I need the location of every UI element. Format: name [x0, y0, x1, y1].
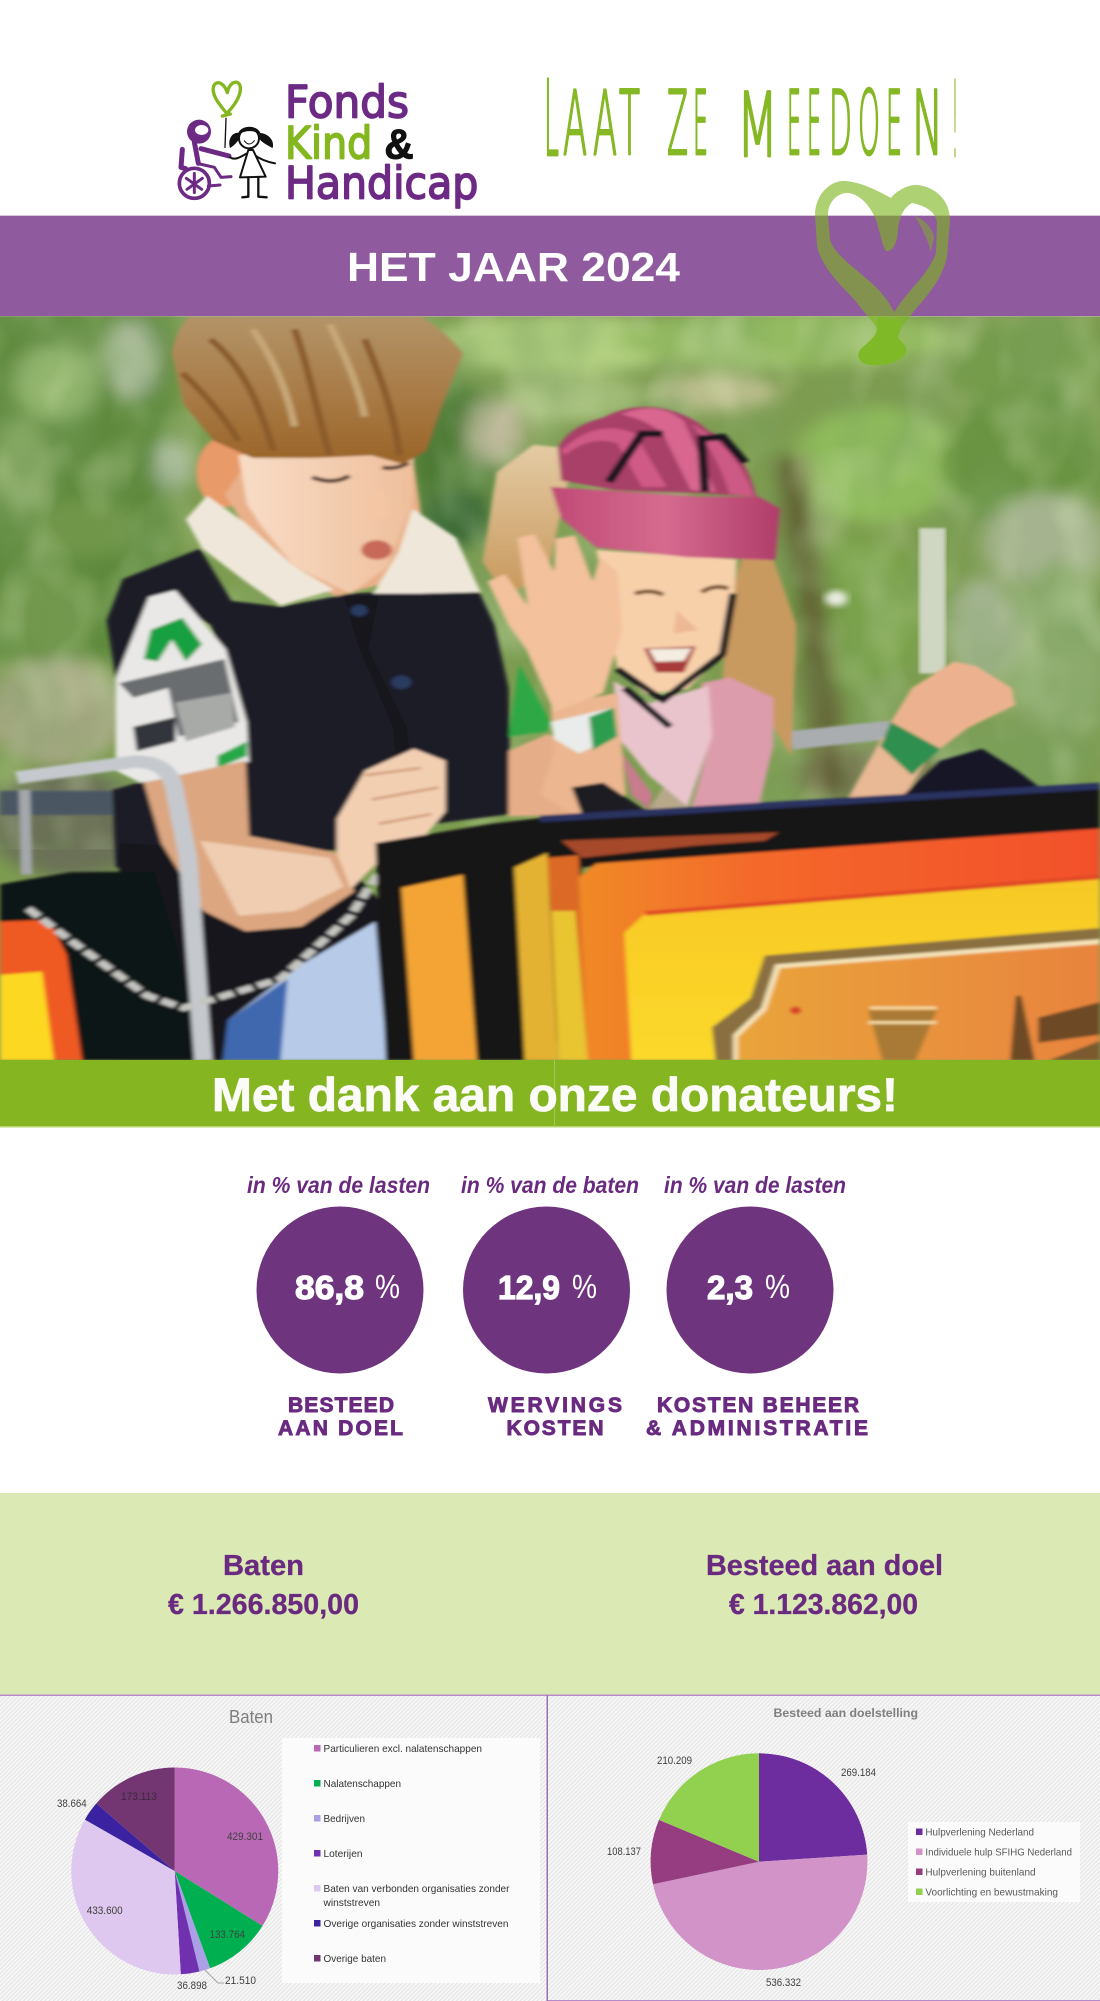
banner: met dank aan onze donateurs	[0, 1060, 1100, 1128]
stat: besteed aan doel: 86,8	[295, 1269, 364, 1306]
chart legend: baten: Overige organisaties zonder winststreven	[324, 1918, 509, 1930]
stat: besteed aan doel: %	[375, 1268, 400, 1305]
slogan: Laat ze meedoen!: A	[563, 72, 587, 175]
left seat	[0, 871, 203, 1060]
total: baten	[168, 1550, 359, 1621]
slogan: Laat ze meedoen!: L	[544, 58, 559, 180]
boy: fleece collar	[186, 496, 334, 606]
stat: besteed aan doel: in % van de lasten	[247, 1172, 430, 1198]
infographic page: !	[952, 59, 958, 181]
pie chart: baten: 38.664	[57, 1798, 87, 1810]
photo background foliage	[0, 310, 1100, 1060]
stat: besteed aan doel: AAN DOEL	[278, 1417, 403, 1440]
slogan: Laat ze meedoen!: E	[787, 72, 801, 175]
chart legend: baten: Loterijen	[324, 1848, 363, 1860]
stat: wervingskosten: KOSTEN	[506, 1417, 604, 1440]
red and yellow left panel	[0, 920, 82, 1060]
pie chart: besteed aan doelstelling: 108.137	[607, 1846, 641, 1858]
boy: ear, neck and face	[196, 437, 250, 507]
chart legend: baten: Overige baten	[324, 1953, 386, 1965]
logo text	[285, 77, 478, 209]
stat: kosten beheer en administratie: in % van de lasten	[664, 1172, 846, 1198]
total: besteed aan doel	[706, 1550, 943, 1621]
girl: face	[596, 550, 737, 694]
chart legend: besteed aan doelstelling: Individuele hulp SFIHG Nederland	[925, 1846, 1072, 1858]
logo text: Fonds	[285, 77, 409, 129]
cup and building icons	[868, 1010, 937, 1060]
photo: two children on a fairground ride	[0, 310, 1100, 1060]
chart legend: besteed aan doelstelling: Voorlichting en bewustmaking	[925, 1886, 1058, 1898]
chart title: besteed aan doelstelling: Besteed aan doelstelling	[774, 1706, 918, 1720]
chart legend: besteed aan doelstelling: Hulpverlening Nederland	[925, 1826, 1034, 1838]
pie chart: baten: 173.113	[121, 1791, 157, 1803]
stat: kosten beheer en administratie: & ADMINISTRATIE	[646, 1417, 868, 1440]
chart legend: baten: Nalatenschappen	[324, 1778, 401, 1790]
slogan: Laat ze meedoen!: D	[829, 72, 852, 175]
pie chart: baten: 133.764	[210, 1929, 245, 1941]
logo text: Kind	[285, 117, 372, 169]
stat: besteed aan doel	[247, 1172, 430, 1440]
logo text: &	[384, 120, 414, 167]
boy: vest	[107, 548, 511, 855]
girl: chin strap	[617, 594, 733, 727]
girl: hair back	[483, 445, 570, 596]
chart legend: baten	[282, 1738, 540, 1983]
boy: arm	[144, 761, 354, 931]
boy: hair	[172, 316, 463, 464]
girl: left arm and sleeve	[509, 664, 551, 737]
logo text: Handicap	[285, 157, 478, 209]
stat: besteed aan doel: BESTEED	[288, 1394, 394, 1417]
seat handles	[904, 749, 1040, 795]
chart legend: baten: Baten van verbonden organisaties zonder	[324, 1883, 510, 1895]
stat: kosten beheer en administratie: %	[765, 1268, 790, 1305]
chart legend: baten: winststreven	[323, 1897, 380, 1909]
stat: wervingskosten: 12,9	[498, 1269, 560, 1306]
chart legend: baten: Bedrijven	[324, 1813, 365, 1825]
boy: jeans	[223, 922, 387, 1060]
stat: wervingskosten: in % van de baten	[461, 1172, 639, 1198]
slogan: Laat ze meedoen!: E	[807, 72, 821, 175]
panel: besteed aan doelstelling chart	[548, 1695, 1100, 2001]
stat: wervingskosten: WERVINGS	[488, 1394, 622, 1417]
total: besteed aan doel: Besteed aan doel	[706, 1550, 943, 1582]
silver rail behind girl	[791, 730, 891, 740]
icon: heart balloon	[213, 82, 240, 116]
stat: kosten beheer en administratie: KOSTEN BEHEER	[657, 1394, 859, 1417]
slogan: Laat ze meedoen!: Z	[667, 72, 688, 175]
ride panel: orange sign	[712, 928, 1100, 1060]
slogan: Laat ze meedoen!: N	[912, 72, 943, 175]
slogan: Laat ze meedoen!: A	[593, 72, 617, 175]
chart frame lines	[0, 1694, 1100, 2001]
boy: hand	[337, 749, 445, 889]
left horizontal bar	[0, 791, 119, 815]
stat: kosten beheer en administratie: 2,3	[707, 1269, 753, 1306]
boy: t-shirt	[116, 590, 249, 783]
pie chart: besteed aan doelstelling: 269.184	[841, 1767, 876, 1779]
chart title: baten: Baten	[229, 1707, 273, 1727]
total: baten: € 1.266.850,00	[168, 1589, 359, 1621]
panel: baten chart	[0, 1695, 547, 2001]
icon: girl with balloon string	[225, 118, 275, 197]
pie chart: besteed aan doelstelling	[607, 1753, 876, 1989]
logo: Fonds Kind & Handicap	[179, 77, 478, 209]
ride panel: orange border	[579, 829, 1100, 1060]
girl: waving hand	[488, 534, 622, 712]
stat: kosten beheer en administratie	[646, 1172, 868, 1440]
slogan: Laat ze meedoen!: E	[693, 72, 708, 175]
total: baten: Baten	[223, 1550, 304, 1582]
pie chart: baten: 36.898	[177, 1980, 207, 1992]
girl: helmet	[558, 407, 756, 497]
ride cabin	[375, 785, 1100, 1060]
slogan: Laat ze meedoen!: E	[886, 72, 902, 175]
total: besteed aan doel: € 1.123.862,00	[729, 1589, 918, 1621]
heart decoration	[815, 181, 950, 365]
stat: wervingskosten	[461, 1172, 639, 1440]
chart legend: baten: Particulieren excl. nalatenschappen	[324, 1743, 482, 1755]
slogan: Laat ze meedoen!: O	[858, 72, 880, 175]
pie chart: besteed aan doelstelling: 210.209	[657, 1755, 692, 1767]
pie chart: baten: 21.510	[225, 1975, 256, 1987]
slogan: Laat ze meedoen!: T	[619, 72, 640, 175]
pie chart: baten: 433.600	[87, 1905, 123, 1917]
icon: child in wheelchair	[179, 120, 231, 198]
girl: dress and bib	[691, 677, 773, 809]
silver handrail	[17, 762, 203, 1060]
stat: wervingskosten: %	[572, 1268, 597, 1305]
ride panel: yellow	[624, 877, 1100, 1060]
chain	[20, 872, 382, 1014]
panel: totals	[0, 1493, 1100, 1695]
slogan: Laat ze meedoen!: M	[737, 74, 778, 177]
pie chart: baten	[57, 1768, 278, 1992]
banner: het jaar 2024: HET JAAR 2024	[347, 244, 681, 290]
chart legend: besteed aan doelstelling: Hulpverlening buitenland	[925, 1866, 1036, 1878]
chart legend: besteed aan doelstelling	[908, 1822, 1080, 1902]
girl: wristband	[551, 707, 617, 753]
slogan: Laat ze meedoen!	[544, 58, 958, 181]
dark seat area below arm	[119, 843, 393, 1060]
pie chart: besteed aan doelstelling: 536.332	[766, 1977, 801, 1989]
banner: het jaar 2024	[0, 215, 1100, 317]
pie chart: baten: 429.301	[227, 1831, 263, 1843]
banner: met dank aan onze donateurs: Met dank aan onze donateurs!	[212, 1068, 898, 1121]
girl: right arm and hand	[849, 737, 934, 797]
